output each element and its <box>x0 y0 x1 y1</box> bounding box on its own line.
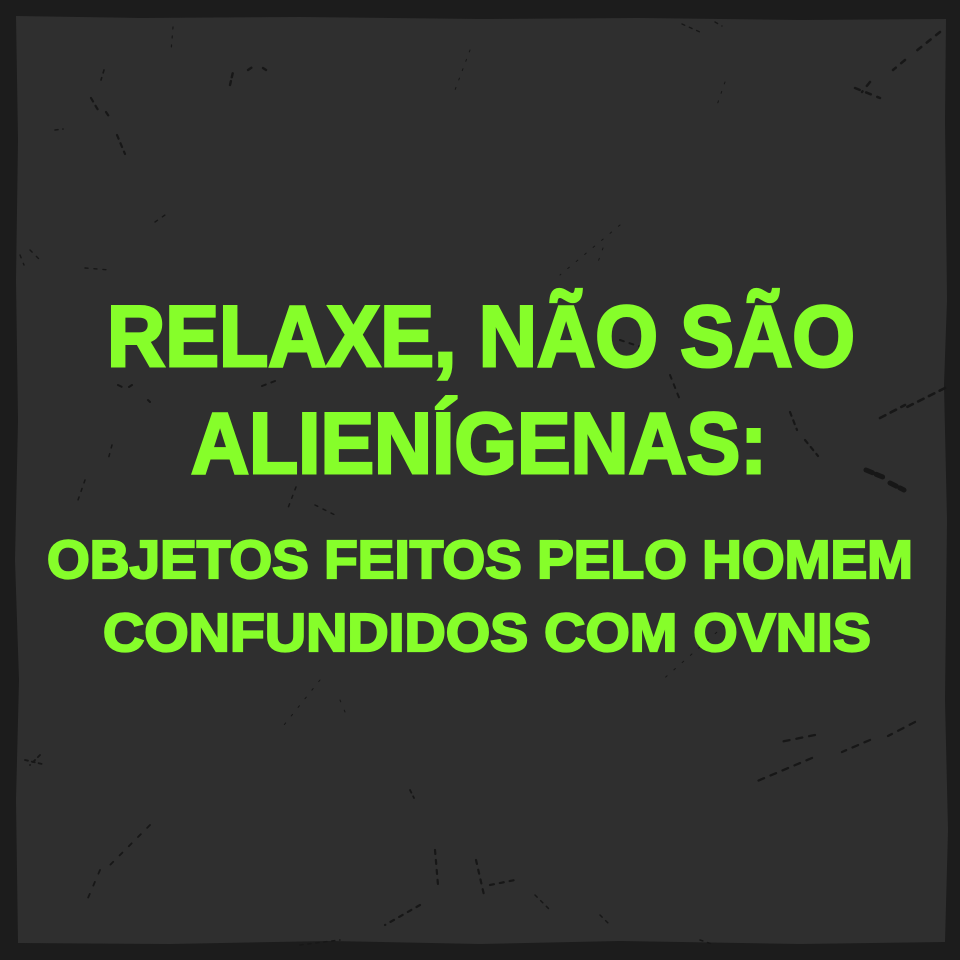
subtitle <box>47 530 913 663</box>
subtitle line 1: OBJETOS FEITOS PELO HOMEM <box>47 530 913 590</box>
title line 1: RELAXE, NÃO SÃO <box>107 289 855 385</box>
subtitle line 2: CONFUNDIDOS COM OVNIS <box>103 603 871 663</box>
title line 2: ALIENÍGENAS: <box>191 396 767 492</box>
title <box>107 289 855 492</box>
